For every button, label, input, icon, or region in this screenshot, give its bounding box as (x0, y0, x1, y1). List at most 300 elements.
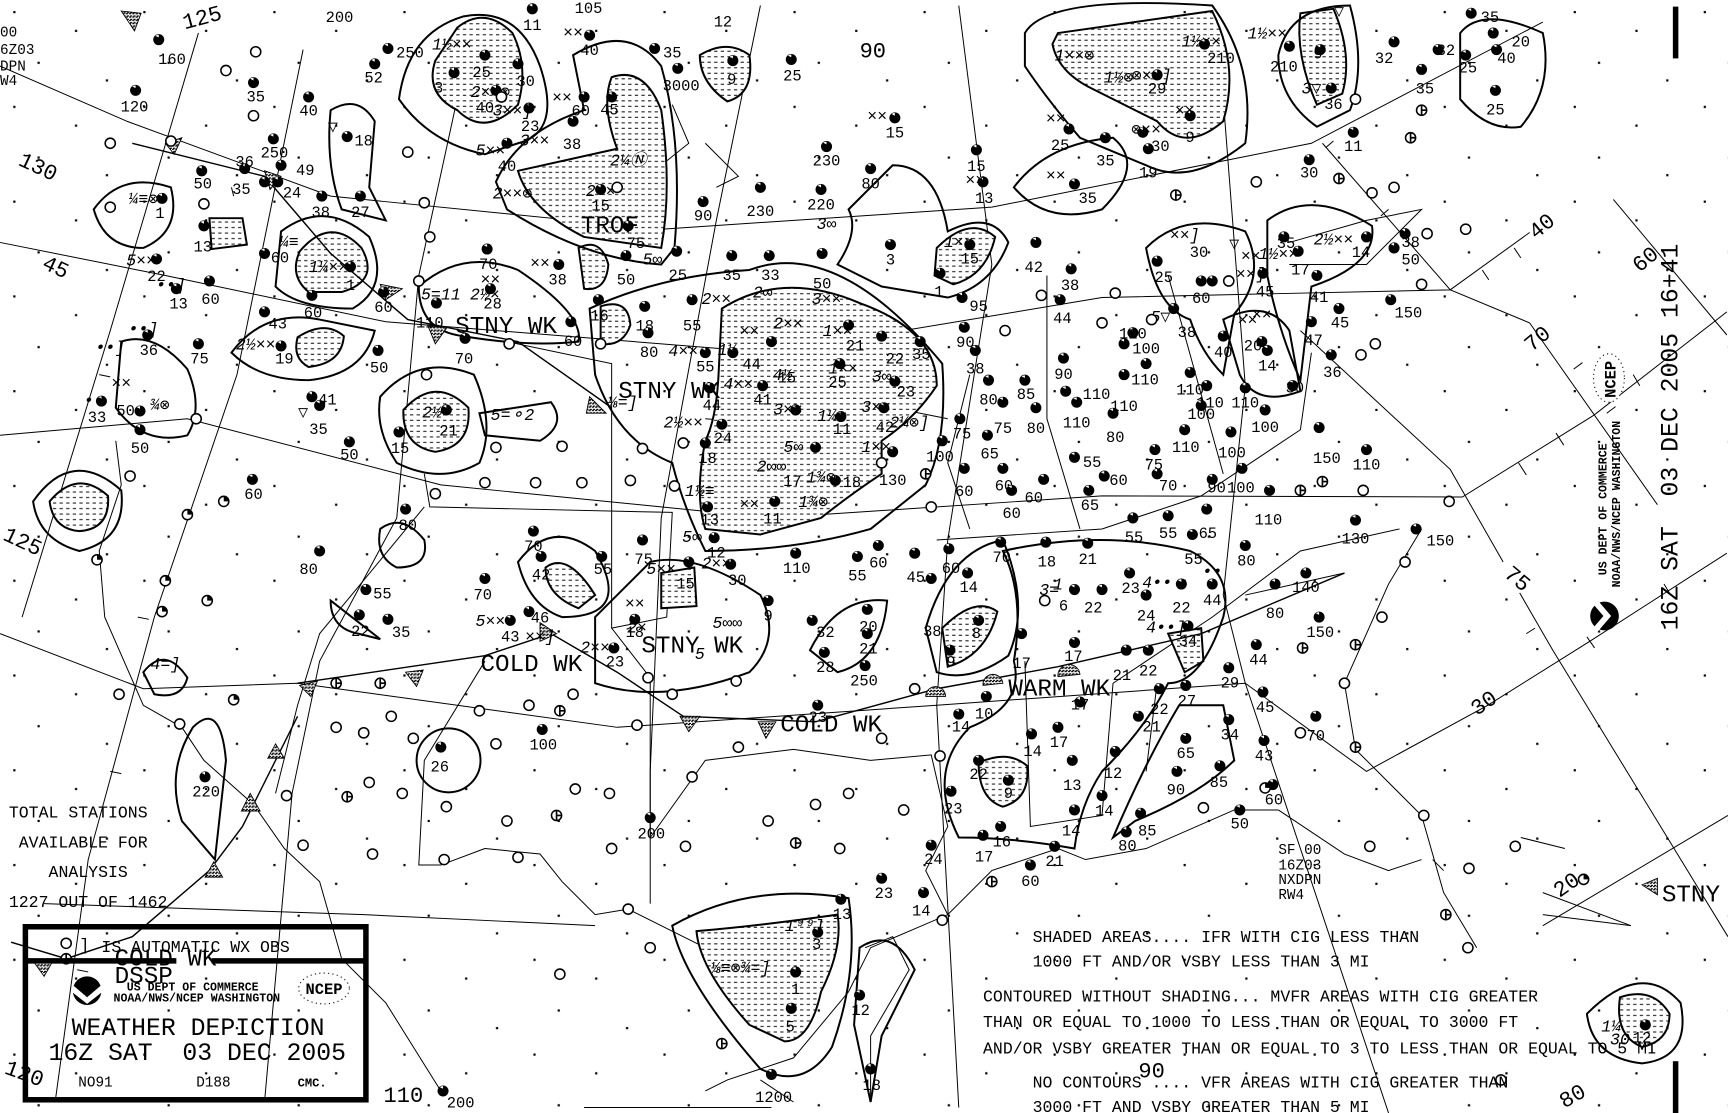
stations with ceiling values: 15 (961, 250, 979, 268)
stations with ceiling values: 34 (1179, 633, 1197, 651)
stations with ceiling values: 60 (572, 103, 590, 121)
stations with ceiling values: 32 (1375, 50, 1393, 68)
stations with ceiling values: 23 (606, 654, 624, 672)
weather symbols: 5▽ (1151, 308, 1170, 327)
stations with ceiling values: 40 (1214, 344, 1232, 362)
stations with ceiling values: 35 (723, 267, 741, 285)
weather symbols: 1¼= (817, 407, 847, 426)
weather symbols: 1¼×× (309, 258, 348, 277)
stations with ceiling values: 55 (1083, 454, 1101, 472)
stations with ceiling values: 130 (1342, 530, 1369, 548)
stations with ceiling values: 29 (1148, 81, 1166, 99)
stations with ceiling values: 36 (140, 342, 158, 360)
stations with ceiling values: 80 (1266, 605, 1284, 623)
stations with ceiling values: 14 (1095, 802, 1113, 820)
stations with ceiling values: 18 (626, 624, 644, 642)
weather symbols: 2½× (470, 286, 500, 305)
weather symbols: 2×× (701, 290, 731, 309)
stations with ceiling values: 25 (783, 67, 802, 85)
weather symbols: ×× (965, 171, 985, 190)
stations with ceiling values: 38 (966, 361, 985, 379)
stations with ceiling values: 110 (1119, 325, 1147, 343)
stations with ceiling values: 15 (676, 575, 695, 593)
stations with ceiling values: 22 (1084, 600, 1102, 618)
stations with ceiling values: 40 (498, 158, 516, 176)
notes: total stations: TOTAL STATIONS (9, 804, 148, 823)
weather symbols: 2××⊗ (493, 184, 532, 203)
weather symbols: 2××⊗ (471, 83, 510, 102)
rotated chart stamp: NOAA/NWS/NCEP WASHINGTON (1611, 421, 1624, 587)
stations with ceiling values: 22 (147, 268, 166, 286)
title block: D188 (196, 1076, 231, 1092)
stations with ceiling values: 1 (346, 277, 355, 295)
weather symbols: ×× (552, 88, 572, 107)
stations with ceiling values: 60 (955, 483, 974, 501)
stations with ceiling values: 49 (296, 162, 315, 180)
stations with ceiling values: 38 (563, 136, 581, 154)
stations with ceiling values: 20 (859, 618, 878, 636)
weather symbols: 1½×× (1181, 32, 1221, 51)
weather symbols: 1¾⊗ (798, 493, 828, 512)
weather symbols: 5 (695, 645, 705, 664)
stations with ceiling values: 1 (791, 981, 800, 999)
stations with ceiling values: 23 (521, 118, 539, 136)
stations with ceiling values: 16 (992, 833, 1011, 851)
stations with ceiling values: 43 (501, 628, 520, 646)
weather symbols: 2×× (586, 182, 615, 201)
weather symbols: ▽ (1334, 3, 1344, 22)
data source stamp (0, 25, 1321, 904)
stations with ceiling values: 120 (121, 98, 148, 116)
weather symbols: 5×× (476, 141, 505, 160)
stations with ceiling values: 50 (813, 276, 831, 294)
stations with ceiling values: 17 (1012, 655, 1031, 673)
data source stamp: 6Z03 (0, 43, 34, 59)
stations with ceiling values: 15 (886, 125, 904, 143)
stations with ceiling values: 17 (1071, 697, 1089, 715)
weather symbols: 4×× (724, 375, 753, 394)
stations with ceiling values: 25 (828, 374, 847, 392)
stations with ceiling values: 100 (926, 449, 954, 467)
notes: total stations: ANALYSIS (49, 863, 128, 882)
stations with ceiling values: 11 (523, 17, 542, 35)
weather symbols: 1¼ (1601, 1017, 1621, 1036)
automatic observation key: ] (79, 936, 89, 955)
grid labels: 90 (860, 39, 886, 64)
weather symbols: 2½×× (1314, 231, 1353, 250)
stations with ceiling values: 23 (1121, 580, 1140, 598)
stations with ceiling values: 41 (753, 391, 772, 409)
data source stamp: NXDPN (1278, 873, 1321, 889)
stations with ceiling values: 9 (946, 654, 956, 672)
stations with ceiling values: 32 (816, 624, 835, 642)
weather symbols: ••] (95, 339, 125, 358)
weather symbols: 4=] (150, 655, 180, 674)
stations with ceiling values: 38 (1401, 234, 1420, 252)
stations with ceiling values: 65 (1081, 497, 1099, 515)
legend notes: THAN OR EQUAL TO 1000 TO LESS THAN OR EQUAL TO 3000 FT (983, 1013, 1518, 1032)
weather symbols: 1½×× (1247, 25, 1287, 44)
stations with ceiling values: 25 (1051, 137, 1069, 155)
weather symbols: ×× (563, 23, 583, 42)
stations with ceiling values: 18 (698, 450, 717, 468)
stations with ceiling values: 110 (1176, 382, 1204, 400)
stations with ceiling values: 18 (862, 1077, 881, 1095)
stations with ceiling values: 100 (529, 736, 557, 754)
stations with ceiling values: 44 (703, 397, 721, 415)
legend notes: SHADED AREAS.... IFR WITH CIG LESS THAN (1033, 928, 1419, 947)
stations with ceiling values: 15 (967, 158, 986, 176)
weather symbols: ¼≡ (279, 233, 299, 252)
stations with ceiling values: 80 (979, 391, 998, 409)
stations with ceiling values: 30 (1190, 244, 1208, 262)
stations with ceiling values: 80 (1118, 838, 1137, 856)
data source stamp: DPN (0, 60, 26, 76)
stations with ceiling values: 23 (944, 800, 963, 818)
stations with ceiling values: 230 (813, 152, 840, 170)
stations with ceiling values: 60 (1021, 873, 1040, 891)
grid labels: 30 (1467, 686, 1503, 722)
weather symbols: 3▽ (1301, 80, 1321, 99)
stations with ceiling values: 250 (261, 145, 288, 163)
grid labels: 75 (1498, 562, 1535, 598)
stations with ceiling values: 15 (391, 440, 409, 458)
stations with ceiling values: 13 (169, 296, 188, 314)
stations with ceiling values: 12 (851, 1002, 870, 1020)
weather symbols: ×× (1252, 306, 1272, 325)
weather symbols: 3×× (812, 290, 841, 309)
stations with ceiling values: 35 (1416, 81, 1434, 99)
grid labels: 90 (1138, 1060, 1165, 1085)
stations with ceiling values: 22 (1172, 600, 1191, 618)
stations with ceiling values: 1 (155, 205, 164, 223)
stations with ceiling values: 12 (1633, 1029, 1651, 1047)
stations with ceiling values: 24 (924, 851, 943, 869)
stations with ceiling values: 35 (1096, 152, 1115, 170)
stations with ceiling values: 36 (1323, 364, 1342, 382)
stations with ceiling values: 16 (590, 308, 609, 326)
stations with ceiling values: 90 (1167, 782, 1185, 800)
stations with ceiling values: 9 (1004, 785, 1013, 803)
stations with ceiling values: 42 (876, 419, 894, 437)
stations with ceiling values: 50 (340, 447, 359, 465)
icon: NCEP badge: NCEP (306, 981, 343, 999)
grid labels: 120 (1, 1056, 47, 1093)
stations with ceiling values: 13 (700, 512, 719, 530)
stations with ceiling values: 40 (1497, 50, 1516, 68)
front labels: STNY WK (455, 314, 557, 341)
stations with ceiling values: 6 (1059, 597, 1068, 615)
stations with ceiling values: 50 (116, 402, 135, 420)
notes: total stations: 1227 OUT OF 1462 (9, 893, 167, 912)
stations with ceiling values: 50 (370, 359, 388, 377)
legend notes: AND/OR VSBY GREATER THAN OR EQUAL TO 3 TO LESS THAN OR EQUAL TO 5 MI (983, 1039, 1657, 1058)
stations with ceiling values: 65 (980, 445, 999, 463)
grid labels: 40 (1524, 209, 1561, 245)
stations with ceiling values: 14 (912, 903, 931, 921)
weather symbols: ××] (1170, 226, 1200, 245)
stations with ceiling values: 90 (694, 207, 712, 225)
stations with ceiling values: 140 (1292, 579, 1320, 597)
weather symbols: ×× (530, 254, 550, 273)
stations with ceiling values: 60 (1002, 505, 1021, 523)
stations with ceiling values: 40 (580, 42, 599, 60)
weather symbols: 2∞∞ (757, 458, 786, 477)
stations with ceiling values: 43 (268, 315, 287, 333)
stations with ceiling values: 13 (194, 238, 212, 256)
stations with ceiling values: 90 (1054, 366, 1073, 384)
stations with ceiling values: 60 (995, 477, 1013, 495)
stations with ceiling values: 200 (637, 826, 665, 844)
stations with ceiling values: 55 (1125, 529, 1143, 547)
weather symbols: 4•• (1142, 573, 1172, 592)
stations with ceiling values: 100 (1187, 406, 1215, 424)
icon: rotated NCEP badge (1594, 354, 1624, 402)
stations with ceiling values: 21 (1045, 853, 1064, 871)
stations with ceiling values: 38 (1178, 324, 1196, 342)
stations with ceiling values: 70 (479, 256, 497, 274)
stations with ceiling values: 90 (1207, 480, 1226, 498)
stations with ceiling values: 85 (1138, 822, 1156, 840)
stations with ceiling values: 20 (1244, 337, 1262, 355)
weather symbols: ×× (1238, 311, 1257, 330)
stations with ceiling values: 17 (1291, 261, 1310, 279)
stations with ceiling values: 19 (275, 351, 294, 369)
title block (25, 927, 366, 1100)
stations with ceiling values: 28 (816, 659, 835, 677)
weather symbols: ×× (1175, 102, 1195, 121)
weather symbols: ××] (1236, 265, 1266, 284)
stations with ceiling values: 36 (235, 153, 254, 171)
stations with ceiling values: 33 (761, 267, 780, 285)
stations with ceiling values: 60 (244, 486, 263, 504)
stations with ceiling values: 22 (969, 766, 988, 784)
stations with ceiling values: 1 (934, 283, 944, 301)
stations with ceiling values: 45 (1256, 283, 1274, 301)
front labels: COLD WK (780, 713, 883, 740)
stations with ceiling values: 44 (742, 356, 761, 374)
stations with ceiling values: 9 (1186, 129, 1195, 147)
stations with ceiling values: 50 (617, 271, 635, 289)
data source stamp: RW4 (1278, 888, 1304, 904)
stations with ceiling values: 45 (907, 569, 925, 587)
stations with ceiling values: 100 (1132, 341, 1160, 359)
stations with ceiling values: 60 (942, 560, 960, 578)
stations with ceiling values: 14 (959, 579, 978, 597)
stations with ceiling values: 110 (783, 560, 811, 578)
weather symbols: 1 (1053, 576, 1063, 595)
legend notes: 1000 FT AND/OR VSBY LESS THAN 3 MI (1033, 952, 1370, 971)
front labels: COLD WK (481, 652, 583, 679)
stations with ceiling values: 110 (1353, 456, 1380, 474)
stations with ceiling values: 30 (1151, 138, 1170, 156)
stations with ceiling values: 3 (434, 80, 443, 98)
stations with ceiling values: 34 (1221, 726, 1239, 744)
stations with ceiling values: 70 (524, 538, 543, 556)
stations with ceiling values: 85 (1017, 386, 1035, 404)
stations with ceiling values: 110 (1131, 372, 1159, 390)
stations with ceiling values: 55 (1184, 551, 1203, 569)
weather symbols: 1×× (944, 233, 974, 252)
weather symbols: 5=11 (421, 286, 461, 305)
stations with ceiling values: 70 (992, 549, 1011, 567)
icon: rotated NOAA logo (1590, 601, 1619, 631)
title block: NO91 (78, 1076, 113, 1092)
weather symbols: 4½ (773, 366, 792, 385)
stations with ceiling values: 80 (640, 344, 658, 362)
grid labels: 70 (1520, 322, 1556, 358)
weather symbols: ⊗××] (1132, 66, 1171, 85)
legend notes: CONTOURED WITHOUT SHADING... MVFR AREAS WITH CIG GREATER (983, 988, 1538, 1007)
stations with ceiling values: 46 (531, 610, 549, 628)
stations with ceiling values: 80 (1237, 552, 1256, 570)
stations with ceiling values: 210 (1207, 50, 1235, 68)
stations with ceiling values: 12 (707, 545, 726, 563)
weather symbols: ▽ (298, 404, 308, 423)
front labels: COLD WK (115, 946, 217, 973)
stations with ceiling values: 150 (1313, 450, 1341, 468)
stations with ceiling values: 55 (848, 568, 867, 586)
weather symbols: 3∞ (872, 367, 892, 386)
weather symbols: ×× (481, 270, 500, 289)
stations with ceiling values: 9 (764, 607, 773, 625)
legend notes (983, 928, 1657, 1113)
stations with ceiling values: 14 (952, 719, 970, 737)
stations with ceiling values: 23 (875, 885, 893, 903)
weather symbols: ×× (1241, 247, 1261, 266)
stations with ceiling values: 220 (192, 784, 220, 802)
stations with ceiling values: 23 (808, 709, 827, 727)
weather symbols: ⅛≡⊗¾=] (711, 959, 770, 978)
stations with ceiling values: 130 (879, 472, 907, 490)
weather symbols: 5×× (476, 612, 505, 631)
stations with ceiling values: 17 (1064, 648, 1083, 666)
stations with ceiling values: 110 (416, 314, 444, 332)
weather symbols: ••] (156, 276, 186, 295)
stations with ceiling values: 30 (1300, 164, 1318, 182)
weather symbols: ⊗×× (1131, 120, 1161, 139)
stations with ceiling values: 55 (683, 318, 701, 336)
weather symbols: ×× (1046, 167, 1066, 186)
weather symbols: 1¾⊗ (806, 469, 836, 488)
stations with ceiling values: 22 (1150, 701, 1169, 719)
front labels: WARM WK (1008, 676, 1111, 703)
weather symbols: 1×× (861, 438, 891, 457)
weather symbols: 1½ (717, 341, 737, 360)
stations with ceiling values: 21 (1113, 667, 1131, 685)
weather symbols: ¼≡⊗ (128, 190, 158, 209)
stations with ceiling values: 55 (696, 358, 715, 376)
stations with ceiling values: 21 (846, 337, 864, 355)
stations with ceiling values: 13 (1063, 777, 1082, 795)
weather symbols: 5∞∞ (712, 614, 742, 633)
stations with ceiling values: 35 (1481, 9, 1499, 27)
stations with ceiling values: 30 (728, 572, 747, 590)
weather symbols: 3×× (773, 400, 803, 419)
stations with ceiling values: 15 (591, 197, 610, 215)
stations with ceiling values: 45 (1331, 314, 1349, 332)
stations with ceiling values: 42 (1024, 259, 1043, 277)
stations with ceiling values: 55 (594, 561, 612, 579)
stations with ceiling values: 25 (1154, 269, 1173, 287)
weather symbols: ×× (625, 594, 645, 613)
stations with ceiling values: 80 (861, 175, 880, 193)
weather symbols: 4••] (1146, 619, 1186, 638)
stations with ceiling values: 50 (131, 440, 149, 458)
weather symbols: 5∞ (682, 528, 702, 547)
stations with ceiling values: 55 (373, 585, 392, 603)
stations with ceiling values: 250 (396, 44, 424, 62)
stations with ceiling values: 45 (600, 102, 619, 120)
stations with ceiling values: 25 (1486, 102, 1505, 120)
weather symbols: 3∞ (817, 215, 837, 234)
stations with ceiling values: 35 (1277, 235, 1295, 253)
stations with ceiling values: 14 (1258, 357, 1277, 375)
stations with ceiling values: 36 (1324, 96, 1343, 114)
stations with ceiling values: 21 (859, 640, 878, 658)
weather symbols: 1××⊗ (1055, 47, 1094, 66)
stations with ceiling values: 38 (923, 623, 942, 641)
stations with ceiling values: 40 (299, 103, 318, 121)
rotated chart stamp: US DEPT OF COMMERCE (1598, 443, 1611, 575)
stations with ceiling values: 30 (516, 73, 535, 91)
stations with ceiling values: 50 (1231, 816, 1249, 834)
stations with ceiling values: 22 (351, 623, 370, 641)
weather symbols: ××] (525, 627, 555, 646)
stations with ceiling values: 17 (1050, 734, 1068, 752)
stations with ceiling values: 41 (1310, 289, 1328, 307)
stations with ceiling values: 60 (1192, 290, 1210, 308)
grid labels: 110 (384, 1084, 423, 1109)
stations with ceiling values: 24 (283, 184, 301, 202)
stations with ceiling values: 44 (1053, 310, 1072, 328)
stations with ceiling values: 110 (1255, 512, 1282, 530)
weather symbols: 3××] (493, 102, 532, 121)
stations with ceiling values: 9 (727, 71, 736, 89)
weather symbols: 2½ (422, 404, 442, 423)
stations with ceiling values: 25 (669, 267, 687, 285)
stations with ceiling values: 160 (158, 51, 186, 69)
weather symbols: 1×× (823, 322, 852, 341)
grid labels: 125 (180, 2, 225, 36)
stations with ceiling values: 38 (548, 271, 567, 289)
stations with ceiling values: 80 (1027, 420, 1045, 438)
stations with ceiling values: 43 (1255, 747, 1273, 765)
stations with ceiling values: 11 (1344, 138, 1363, 156)
front labels (115, 214, 1720, 991)
stations with ceiling values: 29 (1221, 675, 1239, 693)
front labels: DSSP (115, 964, 173, 991)
stations with ceiling values: 26 (430, 758, 449, 776)
stations with ceiling values: 105 (575, 0, 602, 18)
stations with ceiling values: 20 (1512, 33, 1530, 51)
notes: total stations: AVAILABLE FOR (19, 833, 148, 852)
stations with ceiling values: 32 (1437, 42, 1455, 60)
weather symbols: ×× (739, 495, 759, 514)
stations with ceiling values: 38 (311, 204, 330, 222)
stations with ceiling values: 18 (843, 474, 861, 492)
stations with ceiling values: 35 (246, 88, 265, 106)
legend notes: NO CONTOURS .... VFR AREAS WITH CIG GREATER THAN (1033, 1074, 1508, 1093)
grid labels: 60 (1628, 242, 1664, 278)
stations with ceiling values: 60 (374, 299, 393, 317)
stations with ceiling values: 45 (1256, 699, 1274, 717)
stations with ceiling values: 28 (483, 296, 502, 314)
stations with ceiling values: 9 (1313, 45, 1323, 63)
stations with ceiling values: 60 (869, 555, 888, 573)
weather symbols: ▽ (1229, 235, 1239, 254)
weather symbols: 5=⚬2 (491, 406, 534, 425)
